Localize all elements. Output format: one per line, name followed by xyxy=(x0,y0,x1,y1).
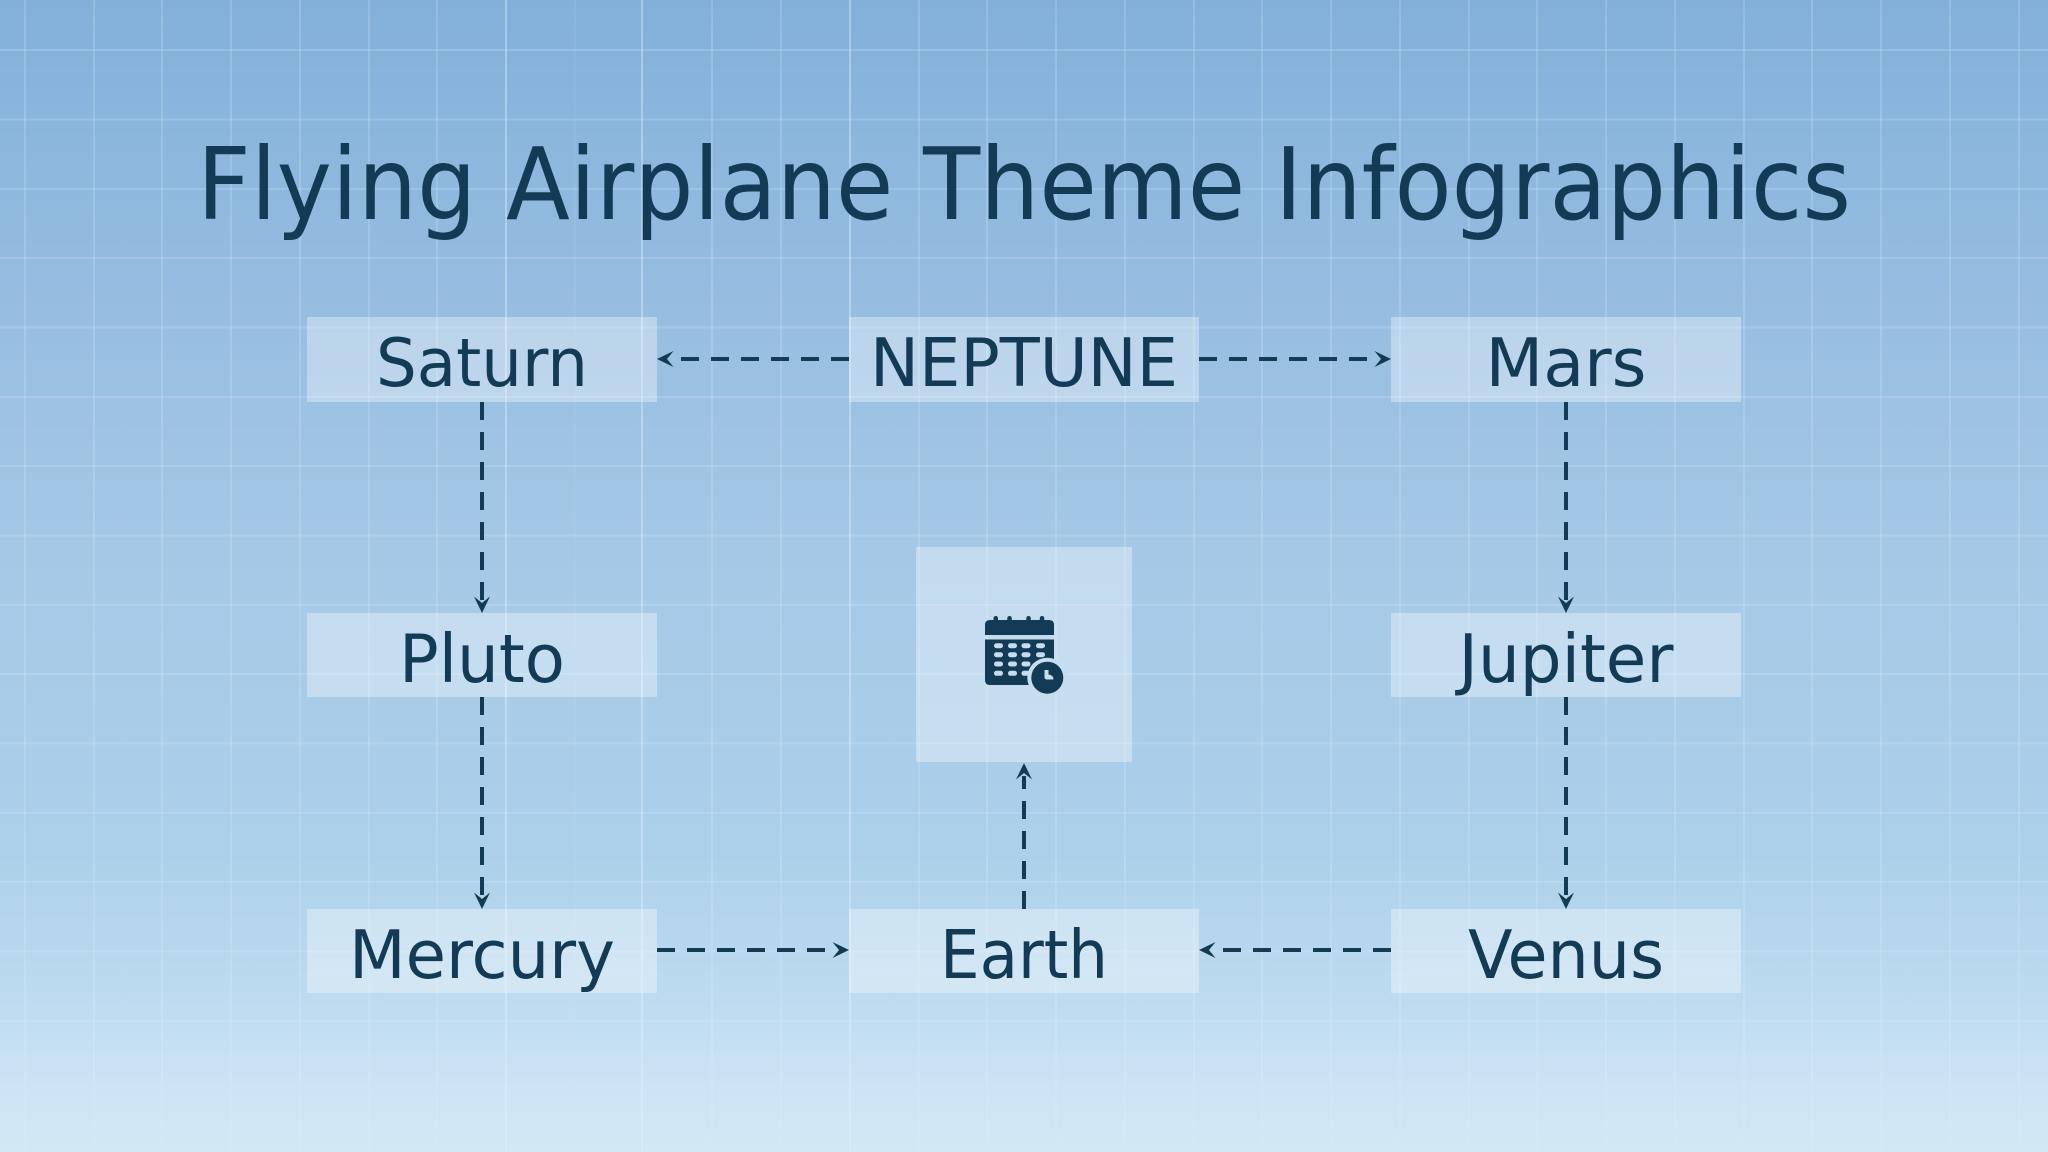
box: Earth: Earth xyxy=(940,916,1108,994)
title: Flying Airplane Theme Infographics xyxy=(197,126,1851,243)
box: Mars: Mars xyxy=(1486,324,1646,402)
box: Mars xyxy=(1391,317,1741,402)
arrow: Jupiter to Venus xyxy=(1558,697,1574,909)
box: Venus xyxy=(1391,909,1741,994)
arrow: Mercury to Earth xyxy=(657,942,849,958)
box: Pluto: Pluto xyxy=(399,620,565,698)
box: Earth xyxy=(849,909,1199,994)
arrow: Venus to Earth xyxy=(1199,942,1391,958)
box: NEPTUNE: NEPTUNE xyxy=(870,324,1178,402)
center panel with calendar icon xyxy=(916,547,1132,762)
arrow: NEPTUNE to Saturn xyxy=(657,351,849,367)
box: Saturn xyxy=(307,317,657,402)
box: Jupiter: Jupiter xyxy=(1455,620,1674,698)
box: Mercury: Mercury xyxy=(349,916,615,994)
arrow: Mars to Jupiter xyxy=(1558,402,1574,613)
arrow: Earth to center panel xyxy=(1016,763,1032,909)
arrow: NEPTUNE to Mars xyxy=(1199,351,1391,367)
icon: calendar with clock xyxy=(985,616,1067,698)
arrow: Pluto to Mercury xyxy=(474,697,490,909)
box: Venus: Venus xyxy=(1468,916,1664,994)
box: Saturn: Saturn xyxy=(376,324,588,402)
arrow: Saturn to Pluto xyxy=(474,402,490,613)
box: Pluto xyxy=(307,613,657,698)
box: Jupiter xyxy=(1391,613,1741,698)
